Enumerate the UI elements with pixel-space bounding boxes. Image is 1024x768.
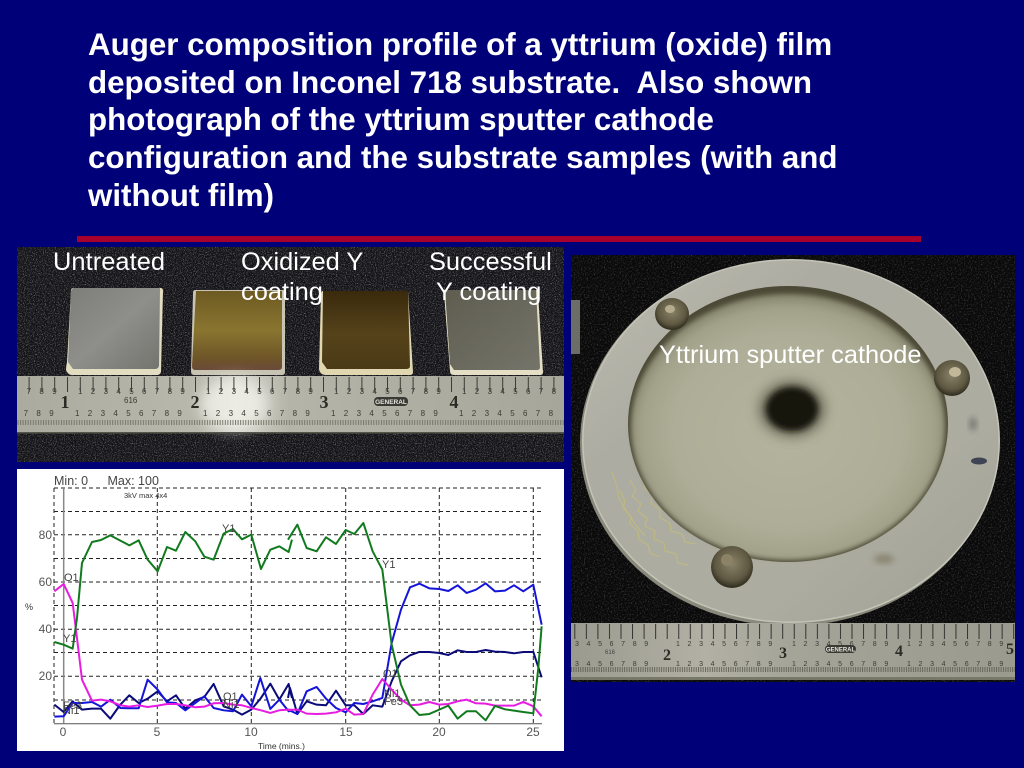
panel: Auger depth profile line chart <box>17 469 564 751</box>
steel ruler: 4 <box>895 643 903 660</box>
series labels: O1 <box>223 691 238 703</box>
x axis labels: 25 <box>526 725 540 739</box>
steel ruler: 123456789 <box>203 409 318 418</box>
rim weld markings <box>612 470 698 565</box>
x axis labels: 5 <box>154 725 161 739</box>
plate: successful Y coating <box>444 290 543 375</box>
panel: substrate samples photograph <box>17 247 564 462</box>
steel ruler: 789 <box>27 387 65 396</box>
sputter crater <box>759 381 825 437</box>
steel ruler: 789 <box>24 409 62 418</box>
GENERAL badge: GENERAL <box>826 648 855 654</box>
plate: oxidized Y coating 2 <box>319 291 413 375</box>
chart header: min and max: Min: 0 <box>54 474 88 488</box>
plate: oxidized Y coating 1 <box>191 290 285 375</box>
plate: untreated <box>66 288 163 375</box>
title: configuration and the substrate samples (with and <box>88 140 837 175</box>
GENERAL badge <box>825 645 856 654</box>
steel ruler: 123456789 <box>676 661 780 668</box>
sample sliver at left edge <box>571 300 580 354</box>
steel ruler: 12345678 <box>462 387 564 396</box>
mounting screw top left <box>655 298 689 330</box>
panel: yttrium sputter cathode photograph <box>571 255 1015 682</box>
title <box>88 27 837 213</box>
series labels: Y1 <box>382 559 395 571</box>
chart header: min and max: Max: 100 <box>108 474 159 488</box>
series labels: Ni1 <box>63 705 80 717</box>
y axis labels: 80 <box>39 528 52 542</box>
series labels: O1 <box>64 572 79 584</box>
steel ruler: 123456789 <box>907 641 1011 648</box>
GENERAL badge: GENERAL <box>375 399 407 406</box>
steel ruler: 4 <box>450 392 458 412</box>
y axis labels: 60 <box>39 575 52 589</box>
steel ruler: 616 <box>605 650 616 656</box>
series labels: Y1 <box>222 523 235 535</box>
steel ruler: 123456789 <box>334 387 449 396</box>
x axis title: Time (mins.) <box>258 741 305 751</box>
series: blue Fe <box>54 583 542 717</box>
steel ruler: 3456789 <box>575 641 656 648</box>
label: oxidized Y coating: coating <box>241 278 323 306</box>
steel ruler: 616 <box>124 396 138 405</box>
title: deposited on Inconel 718 substrate. Also shown <box>88 65 812 100</box>
steel ruler: 12345678 <box>459 409 561 418</box>
x axis labels <box>60 725 540 739</box>
steel ruler: 5 <box>1006 641 1014 658</box>
chart subtitle: 3kV max 4x4 <box>124 491 167 500</box>
title: without film) <box>88 178 274 213</box>
series labels: Ni1 <box>384 688 401 700</box>
label: yttrium sputter cathode: Yttrium sputter cathode <box>659 341 922 369</box>
label: untreated: Untreated <box>53 248 165 276</box>
series labels: Fe3 <box>384 696 403 708</box>
y axis labels: 20 <box>39 669 52 683</box>
series labels: Ni1 <box>223 699 240 711</box>
steel ruler: 3 <box>320 392 328 412</box>
series: green Y <box>54 523 542 720</box>
x axis labels: 10 <box>244 725 258 739</box>
steel ruler: 2 <box>663 647 671 664</box>
label: successful Y coating: Y coating <box>436 278 541 306</box>
series: magenta O <box>54 584 542 716</box>
red title rule <box>77 236 921 242</box>
series labels: Y1 <box>63 633 76 645</box>
series: navy Ni <box>54 650 542 719</box>
steel ruler: 3456789 <box>575 661 656 668</box>
title: Auger composition profile of a yttrium (oxide) film <box>88 27 832 62</box>
steel ruler: 123456789 <box>792 661 896 668</box>
cathode raised dome <box>628 286 948 562</box>
cathode backing plate <box>580 259 1000 626</box>
steel ruler: 1 <box>60 392 70 412</box>
steel ruler: 123456789 <box>78 387 193 396</box>
y axis labels <box>25 528 52 683</box>
y axis labels: % <box>25 602 33 612</box>
series labels: O1 <box>383 668 398 680</box>
x axis labels: 20 <box>432 725 446 739</box>
steel ruler: 123456789 <box>206 387 321 396</box>
title: photograph of the yttrium sputter cathode <box>88 102 714 137</box>
steel ruler: 123456789 <box>907 661 1011 668</box>
mounting screw right <box>934 360 970 396</box>
steel ruler: 123456789 <box>792 641 896 648</box>
label: oxidized Y coating: Oxidized Y <box>241 248 363 276</box>
steel ruler: 123456789 <box>676 641 780 648</box>
steel ruler: 123456789 <box>331 409 446 418</box>
chart axes <box>54 488 542 724</box>
steel ruler: 123456789 <box>75 409 190 418</box>
steel ruler: 2 <box>190 392 200 412</box>
y axis labels: 40 <box>39 622 52 636</box>
mounting screw bottom <box>711 546 753 588</box>
steel ruler <box>571 623 1015 680</box>
series labels <box>63 523 403 717</box>
steel ruler <box>17 376 564 434</box>
label: successful Y coating: Successful <box>429 248 552 276</box>
x axis labels: 15 <box>339 725 353 739</box>
steel ruler: 3 <box>779 645 787 662</box>
x axis labels: 0 <box>60 725 67 739</box>
series labels: Fe3 <box>63 700 82 712</box>
